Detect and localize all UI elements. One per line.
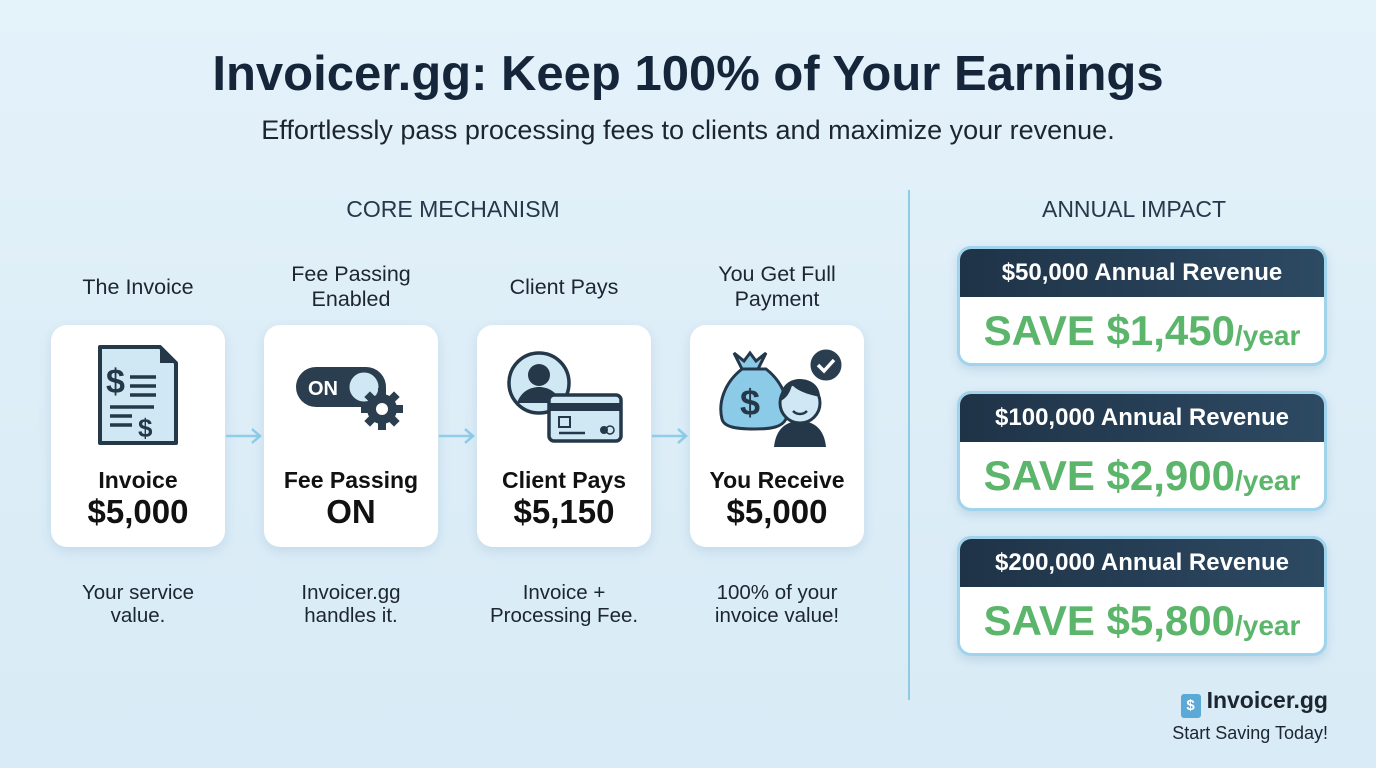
card: you receive: You Receive bbox=[709, 467, 845, 493]
caption 4 bbox=[715, 581, 839, 627]
savings card 200k: $200,000 Annual Revenue bbox=[995, 549, 1289, 576]
icon: money bag and person bbox=[719, 350, 842, 447]
arrow 2 bbox=[439, 428, 475, 444]
card: invoice: $5,000 bbox=[88, 493, 188, 530]
step label 4: Payment bbox=[735, 287, 819, 311]
heading: core mechanism: CORE MECHANISM bbox=[346, 196, 560, 222]
divider bbox=[908, 190, 910, 700]
card: invoice: Invoice bbox=[98, 467, 178, 493]
step labels: The Invoice bbox=[82, 275, 194, 299]
icon: invoice document: $ bbox=[138, 413, 153, 443]
icon: invoice document: $ bbox=[106, 363, 125, 401]
savings card 200k: SAVE $5,800/year bbox=[984, 597, 1300, 644]
caption 2 bbox=[301, 581, 401, 627]
step label 4 bbox=[718, 262, 836, 311]
title: Invoicer.gg: Keep 100% of Your Earnings bbox=[212, 47, 1164, 101]
caption 4: invoice value! bbox=[715, 604, 839, 627]
caption 1: Your service bbox=[82, 581, 194, 604]
step label 3: Client Pays bbox=[510, 275, 618, 299]
icon: invoice document bbox=[98, 345, 178, 445]
caption 3: Processing Fee. bbox=[490, 604, 638, 627]
caption 1 bbox=[82, 581, 194, 627]
brand logo: $ bbox=[1186, 697, 1195, 714]
savings card 100k: $100,000 Annual Revenue bbox=[995, 404, 1289, 431]
step label 2 bbox=[291, 262, 411, 311]
arrow 3 bbox=[652, 428, 688, 444]
card: client pays: Client Pays bbox=[502, 467, 626, 493]
card: fee passing bbox=[264, 325, 438, 547]
card: invoice bbox=[51, 325, 225, 547]
caption 3: Invoice + bbox=[523, 581, 605, 604]
savings card 100k bbox=[957, 391, 1327, 511]
step label 2: Fee Passing bbox=[291, 262, 411, 286]
brand logo bbox=[1181, 687, 1328, 718]
caption 1: value. bbox=[111, 604, 165, 627]
caption 2: Invoicer.gg bbox=[301, 581, 401, 604]
heading: annual impact: ANNUAL IMPACT bbox=[1042, 196, 1226, 222]
savings card 200k bbox=[957, 536, 1327, 656]
savings card 100k: SAVE $2,900/year bbox=[984, 452, 1300, 499]
brand footer bbox=[1172, 687, 1328, 743]
step label 4: You Get Full bbox=[718, 262, 836, 286]
card: client pays: $5,150 bbox=[514, 493, 614, 530]
card: you receive bbox=[690, 325, 864, 547]
icon: client with card bbox=[507, 351, 623, 443]
card: fee passing: ON bbox=[326, 493, 376, 530]
icon: toggle with gear bbox=[296, 367, 403, 430]
savings card 50k: $50,000 Annual Revenue bbox=[1002, 259, 1282, 286]
savings card 50k: SAVE $1,450/year bbox=[984, 307, 1300, 354]
subtitle: Effortlessly pass processing fees to clients and maximize your revenue. bbox=[261, 115, 1115, 145]
savings card 50k bbox=[957, 246, 1327, 366]
caption 2: handles it. bbox=[304, 604, 398, 627]
caption 3 bbox=[490, 581, 638, 627]
step label 2: Enabled bbox=[312, 287, 390, 311]
brand footer: Start Saving Today! bbox=[1172, 723, 1328, 743]
arrow 1 bbox=[226, 428, 262, 444]
card: client pays bbox=[477, 325, 651, 547]
icon: toggle with gear: ON bbox=[308, 378, 338, 400]
card: fee passing: Fee Passing bbox=[284, 467, 418, 493]
brand logo: Invoicer.gg bbox=[1207, 687, 1328, 713]
card: you receive: $5,000 bbox=[727, 493, 827, 530]
icon: money bag and person: $ bbox=[740, 382, 760, 423]
caption 4: 100% of your bbox=[717, 581, 837, 604]
